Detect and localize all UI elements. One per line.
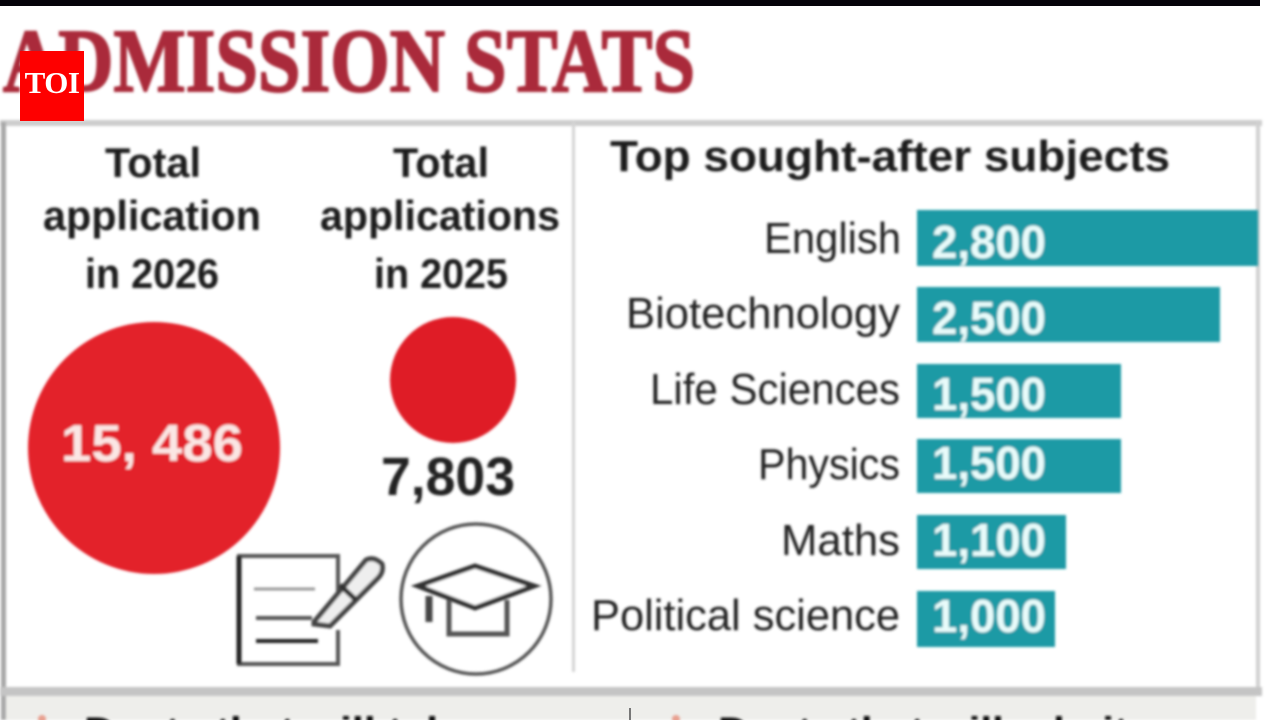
footer divider	[629, 708, 631, 720]
heading: total applications in 2025: applications	[320, 192, 560, 239]
bar: Maths 1,100: Maths	[781, 516, 900, 565]
footer left marker	[38, 715, 46, 720]
panel: total applications 2025	[320, 139, 560, 507]
bar: Biotechnology 2,500	[626, 287, 1220, 344]
bar: Life Sciences 1,500: 1,500	[932, 368, 1046, 420]
bar: Political science 1,000: 1,000	[932, 590, 1046, 642]
red circle: 15,486: 15, 486	[61, 415, 243, 473]
icon: form and pen	[239, 556, 382, 664]
bar: Physics 1,500: Physics	[758, 440, 900, 489]
heading: total applications in 2025: Total	[393, 139, 489, 186]
bar: Biotechnology 2,500: Biotechnology	[626, 289, 900, 338]
bar chart: top sought-after subjects	[591, 132, 1258, 647]
heading: total application in 2026: in 2026	[85, 250, 219, 297]
bar: English 2,800	[764, 210, 1258, 268]
heading: total application in 2026	[43, 139, 261, 297]
red circle: 2025	[390, 317, 516, 443]
footer right marker	[672, 715, 680, 720]
panel: total applications 2026	[28, 139, 280, 574]
heading: total applications in 2025: in 2025	[374, 250, 508, 297]
bar: Life Sciences 1,500	[650, 364, 1121, 420]
chart heading: Top sought-after subjects	[610, 132, 1170, 181]
bar: Life Sciences 1,500: Life Sciences	[650, 365, 900, 414]
bar: Physics 1,500: 1,500	[932, 437, 1046, 489]
footer text strip	[38, 710, 1128, 720]
bar: English 2,800: 2,800	[932, 216, 1046, 268]
red circle: 15,486	[28, 322, 280, 574]
title: ADMISSION STATS	[3, 12, 695, 111]
bar: Political science 1,000: Political science	[591, 591, 900, 640]
bar: Physics 1,500	[758, 437, 1121, 493]
bar: Maths 1,100: 1,100	[932, 514, 1046, 566]
bar: English 2,800: English	[764, 214, 901, 263]
bar: Biotechnology 2,500: 2,500	[932, 292, 1046, 344]
value: 7,803: 7,803	[381, 447, 515, 507]
heading: total applications in 2025	[320, 139, 560, 297]
heading: total application in 2026: application	[43, 192, 261, 239]
TOI logo: TOI	[25, 65, 79, 100]
icon: graduation cap in circle	[401, 524, 551, 674]
TOI logo	[20, 51, 84, 121]
top black bar	[0, 0, 1260, 6]
bar: Political science 1,000	[591, 590, 1055, 647]
heading: total application in 2026: Total	[105, 139, 201, 186]
bar: Maths 1,100	[781, 514, 1066, 569]
